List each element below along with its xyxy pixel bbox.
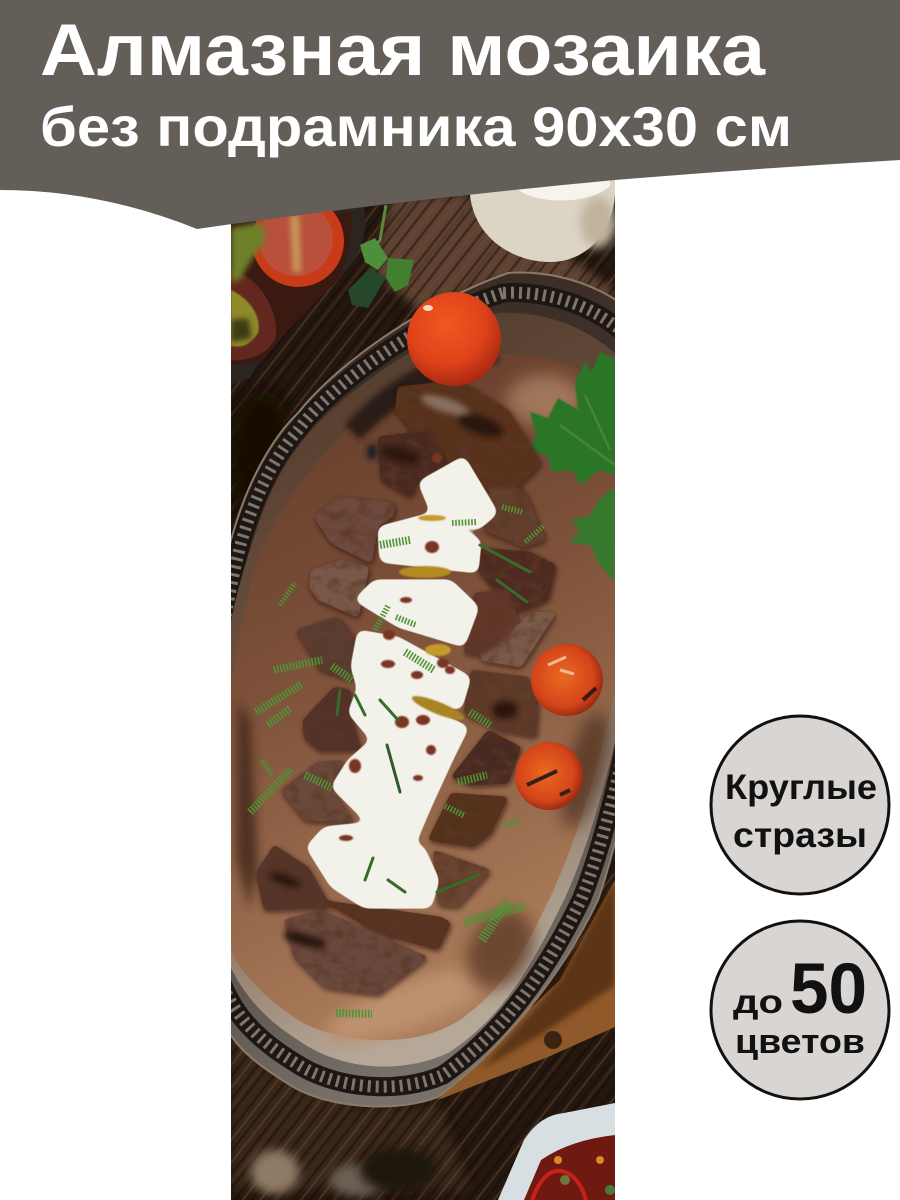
badge: up to 50 colours (711, 921, 889, 1099)
small plate with tomato slices (231, 195, 365, 385)
cutting board under tray (438, 880, 615, 1100)
herb sprig top (348, 205, 414, 308)
grill highlights on meat (268, 391, 518, 951)
chili sauce bowl (498, 1103, 615, 1200)
header banner (0, 0, 900, 229)
badge: round rhinestones (711, 716, 889, 894)
copper shading on the tray (236, 345, 618, 1056)
rosemary needles and stems (337, 545, 530, 892)
photo: meat platter on wooden table (231, 180, 615, 1200)
wooden table background (228, 170, 615, 1200)
oval metal tray (231, 272, 615, 1108)
badge: up to 50 colours: до (733, 983, 783, 1020)
badge: up to 50 colours: цветов (735, 1023, 865, 1061)
green herbs scattered (250, 507, 545, 1014)
badge: up to 50 colours: 50 (790, 950, 867, 1029)
title: Алмазная мозаика (40, 10, 767, 91)
sliced meat pieces (256, 380, 556, 995)
parsley (530, 352, 615, 582)
white jug (470, 180, 615, 262)
sour cream (306, 456, 498, 908)
grilled cherry tomatoes (515, 644, 603, 810)
tomato on tray (407, 292, 501, 386)
oil drizzle and chili flakes (339, 453, 466, 841)
badge: round rhinestones: стразы (733, 816, 867, 855)
subtitle: без подрамника 90х30 см (40, 95, 792, 158)
badge: round rhinestones: Круглые (725, 768, 877, 807)
